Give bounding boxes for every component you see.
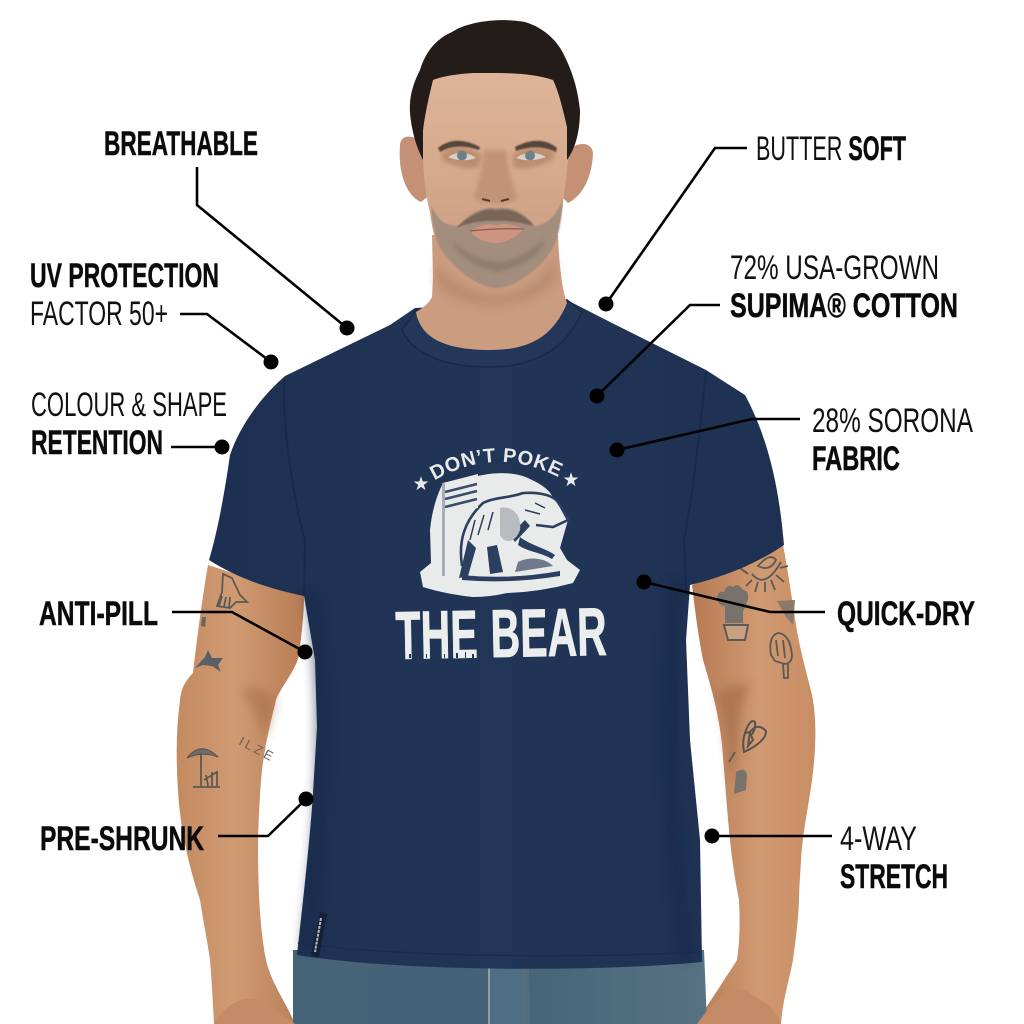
left arm shading (240, 687, 276, 738)
right arm shading (716, 684, 750, 790)
label: anti-pill: ANTI-PILL (39, 595, 158, 633)
the bear text: THE (395, 596, 478, 674)
label: sorona fabric (610, 402, 973, 478)
eyebrows (438, 141, 557, 152)
eyes (448, 153, 546, 160)
label: sorona fabric: FABRIC (812, 440, 900, 478)
tattoo: umbrella and chair (187, 749, 220, 787)
cheek patch under lip (452, 238, 545, 272)
label: butter soft (598, 130, 906, 312)
hair (410, 20, 580, 160)
label: pre-shrunk (40, 792, 314, 858)
tattoo: fish (195, 650, 223, 672)
label: quick-dry: QUICK-DRY (837, 595, 975, 633)
stars (412, 469, 580, 495)
tattoo: hand (217, 574, 247, 608)
tattoo: ilze: ILZE (237, 733, 278, 765)
label: 4-way stretch (704, 820, 948, 896)
neck shadow (436, 255, 556, 305)
text distress (398, 651, 474, 658)
left arm (177, 565, 304, 1024)
ground (462, 559, 560, 581)
shirt (209, 300, 784, 969)
label: uv protection (30, 257, 278, 370)
stars: ★ (562, 469, 580, 491)
shirt tag (311, 912, 327, 957)
label: colour and shape retention: RETENTION (31, 424, 163, 462)
don't poke text: DON’T POKE (429, 448, 564, 480)
label: pre-shrunk: PRE-SHRUNK (40, 820, 204, 858)
hand right (697, 989, 781, 1024)
tattoo: sun (740, 557, 788, 592)
tattoo: popsicle (770, 633, 792, 678)
emblem background (420, 473, 580, 597)
stars: ★ (412, 473, 430, 495)
shirt collar (402, 300, 582, 367)
shirt shading (300, 580, 692, 960)
label: uv protection: UV PROTECTION (30, 257, 219, 295)
right arm (692, 545, 815, 1024)
ears (400, 137, 430, 202)
mustache (456, 209, 534, 228)
tattoo: broken heart (743, 721, 766, 752)
tattoo: cactus (717, 585, 748, 640)
tattoo: bird (777, 600, 795, 625)
neck (416, 235, 567, 350)
tattoo: skull (734, 770, 747, 794)
label: supima cotton: 72% USA-GROWN (730, 249, 939, 287)
tattoos (187, 557, 795, 794)
label: uv protection: FACTOR 50+ (30, 295, 168, 333)
label: supima cotton (590, 249, 958, 404)
the bear text: BEAR (490, 594, 607, 672)
label: butter soft: BUTTER SOFT (756, 130, 906, 168)
shirt hem stitching (298, 943, 700, 956)
label: quick-dry (636, 574, 975, 633)
the bear text (395, 594, 607, 674)
eye sockets (442, 147, 555, 168)
label: colour and shape retention: COLOUR & SHAPE (31, 386, 227, 424)
shirt graphic (395, 448, 607, 674)
label: breathable (104, 125, 354, 336)
figure: man wearing t-shirt (176, 20, 816, 1024)
hand left (214, 999, 295, 1024)
label: anti-pill (39, 595, 312, 660)
flag (442, 474, 478, 576)
label: 4-way stretch: 4-WAY (840, 820, 917, 858)
jeans (293, 950, 707, 1024)
jeans fly (489, 962, 530, 1024)
label: 4-way stretch: STRETCH (840, 858, 948, 896)
face (423, 60, 568, 288)
label: colour and shape retention (31, 386, 230, 462)
label: breathable: BREATHABLE (104, 125, 258, 163)
bear (459, 493, 568, 578)
nose (474, 150, 518, 204)
lips (470, 224, 524, 243)
stubble (431, 200, 563, 288)
shirt seams (284, 372, 706, 596)
